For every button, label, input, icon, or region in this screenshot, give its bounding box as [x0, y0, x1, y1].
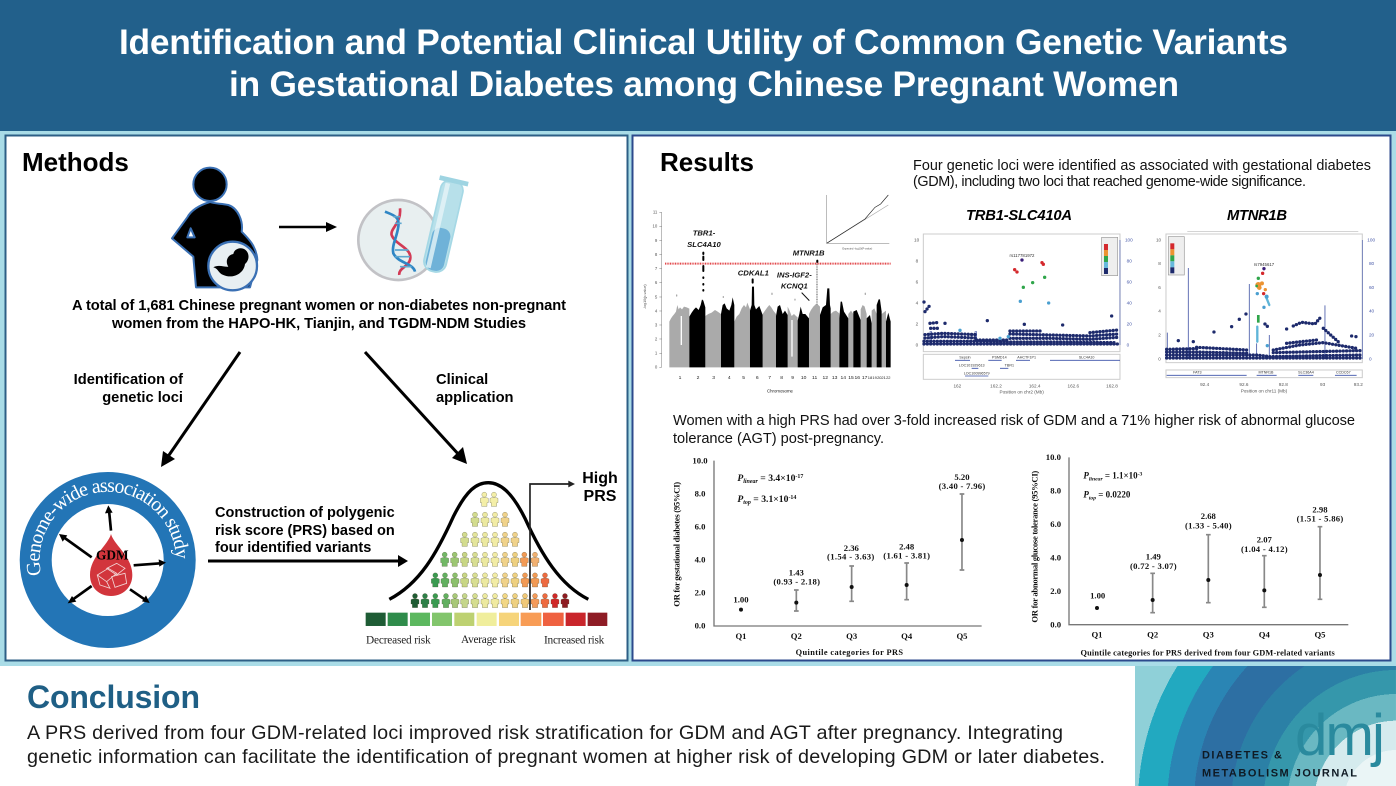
- text: construction of polygenic risk score: [215, 505, 395, 556]
- gene track: LOC100996579: [964, 371, 990, 375]
- panel: methods: [4, 134, 628, 662]
- chart: OR for gestational diabetes: [671, 455, 985, 657]
- chromosome numbers: 5: [742, 375, 745, 381]
- OR value labels: 2.48: [899, 541, 915, 551]
- heading: locus MTNR1B: MTNR1B: [1227, 208, 1287, 224]
- x axis labels: Q5: [1314, 630, 1326, 640]
- y axis ticks: 8.0: [1050, 485, 1061, 495]
- axis labels: 10: [914, 237, 920, 242]
- ring label: Genome-wide association study: [26, 482, 188, 576]
- OR value labels: (1.51 - 5.86): [1297, 514, 1343, 524]
- logo text: METABOLISM JOURNAL: [1202, 767, 1357, 779]
- chromosome numbers: [679, 375, 891, 394]
- OR value labels: 1.00: [1090, 591, 1105, 601]
- y axis ticks: 6.0: [695, 521, 705, 531]
- text: conclusion body: A PRS derived from four GDM-related loci improved risk stratification for GDM and AGT after pregnancy. Integrating: [27, 722, 1063, 744]
- label: identification of genetic loci: genetic loci: [102, 390, 183, 406]
- chromosome numbers: 6: [756, 375, 759, 381]
- OR value labels: 2.36: [844, 543, 860, 553]
- text: conclusion body: genetic information can facilitate the identification of pregnant women at higher risk of developing GDM or later diabetes.: [27, 746, 1105, 768]
- gene labels: KCNQ1: [781, 281, 808, 290]
- arrow: to clinical application: [365, 352, 467, 464]
- axis labels: 100: [1125, 237, 1133, 242]
- gene track: [923, 354, 1120, 379]
- OR value labels: (0.72 - 3.07): [1130, 561, 1177, 571]
- axis labels: 40: [1127, 300, 1132, 305]
- curve: [389, 483, 588, 599]
- y axis: [643, 210, 662, 370]
- y axis ticks: 4.0: [695, 555, 705, 565]
- y axis ticks: 2.0: [1050, 586, 1061, 596]
- OR value labels: 1.43: [789, 567, 805, 577]
- white gaps near centromeres: [681, 316, 792, 357]
- gene track: FAT3: [1193, 371, 1202, 375]
- axis labels: 0: [1127, 342, 1130, 347]
- gene track: LOC101929613: [959, 364, 985, 368]
- label: identification of genetic loci: Identification of: [74, 372, 183, 388]
- OR value labels: (1.04 - 4.12): [1241, 544, 1288, 554]
- chromosome numbers: 20: [877, 375, 882, 380]
- gene track: TBR1: [1005, 364, 1014, 368]
- y axis: 11: [653, 210, 658, 215]
- text: construction of polygenic risk score: Construction of polygenic: [215, 505, 395, 521]
- LD coloured points: [1257, 297, 1269, 342]
- P values: P: [1083, 490, 1089, 500]
- axis labels: 8: [916, 258, 919, 263]
- axis labels: 10: [1156, 237, 1162, 242]
- x axis title: Quintile categories for PRS: [796, 648, 903, 657]
- axis labels: 100: [1367, 237, 1375, 242]
- significance line: [665, 261, 891, 267]
- x axis ticks: 92.6: [1239, 382, 1249, 387]
- x axis ticks: 162.2: [990, 383, 1002, 388]
- x axis labels: Q2: [1147, 630, 1158, 640]
- arrow: to GWAS: [161, 352, 240, 467]
- chart: Manhattan plot: [643, 195, 891, 394]
- header banner: [0, 0, 1396, 131]
- gene track: [1166, 370, 1362, 378]
- inset: QQ plot: [827, 195, 889, 250]
- x axis labels: Q1: [1091, 630, 1103, 640]
- title: in Gestational Diabetes among Chinese Pregnant Women: [229, 65, 1179, 104]
- chromosome numbers: 1: [679, 375, 682, 381]
- risk colour scale: [366, 613, 607, 626]
- heading: methods: Methods: [22, 147, 129, 177]
- label: GDM: GDM: [96, 547, 129, 562]
- chromosome numbers: 14: [841, 375, 846, 381]
- high PRS marker arrow: [530, 484, 569, 610]
- LD legend: [1102, 237, 1118, 276]
- axis labels: 2: [1158, 333, 1161, 338]
- axis labels: 60: [1369, 285, 1375, 290]
- heading: conclusion: Conclusion: [27, 679, 200, 715]
- chromosome numbers: 7: [768, 375, 771, 381]
- chromosome numbers: 8: [780, 375, 783, 381]
- chromosome numbers: 15: [848, 375, 854, 381]
- axis labels: 20: [1369, 333, 1375, 338]
- y axis ticks: 10.0: [1046, 452, 1061, 462]
- y axis: 6: [655, 280, 658, 285]
- P values: = 1.1×10: [1103, 470, 1138, 480]
- y axis: 10: [653, 224, 658, 229]
- axis labels: 20: [1127, 321, 1132, 326]
- OR value labels: 2.07: [1257, 534, 1273, 544]
- axis labels: 4: [1158, 309, 1161, 314]
- y axis: 0: [655, 365, 658, 370]
- axis labels: 4: [916, 300, 919, 305]
- y axis: 9: [655, 238, 658, 243]
- gene track: PSMD14: [992, 356, 1007, 360]
- text: high PRS risk: Women with a high PRS had over 3-fold increased risk of GDM and a 71% higher risk of abnormal glucose: [673, 413, 1355, 429]
- y axis: 8: [655, 252, 658, 257]
- x axis labels: Q1: [735, 631, 747, 641]
- x axis labels: Q5: [956, 631, 968, 641]
- P values: [1083, 470, 1143, 502]
- gene labels: SLC4A10: [687, 240, 722, 249]
- LD coloured points: [1022, 276, 1046, 289]
- gene track: CCDC67: [1336, 371, 1351, 375]
- background band: [0, 131, 1396, 666]
- axis labels: 2: [916, 321, 919, 326]
- gene track: MTNR1B: [1258, 371, 1274, 375]
- gene track: Sepsin: [959, 356, 971, 360]
- gene track: AHCTF1P1: [1017, 356, 1036, 360]
- OR value labels: 2.68: [1201, 511, 1217, 521]
- icon: pregnant woman: [172, 168, 257, 290]
- axis labels: 0: [1369, 356, 1372, 361]
- axis labels: [914, 237, 1133, 347]
- chromosome numbers: 9: [791, 375, 794, 381]
- gene labels: INS-IGF2-: [777, 270, 812, 279]
- chr11 signal column: [814, 261, 819, 305]
- chromosome numbers: 17: [862, 375, 868, 381]
- icon: test tube: [419, 175, 469, 275]
- x axis labels: [735, 631, 968, 641]
- OR value labels: 2.98: [1312, 504, 1328, 514]
- text: study population: [72, 298, 566, 332]
- chromosome numbers: 19: [872, 375, 878, 380]
- y axis: 2: [655, 336, 658, 341]
- axis labels: 6: [1158, 285, 1161, 290]
- recombination spikes: [1167, 268, 1325, 359]
- inset: QQ plot: Expected -log10(P-value): [842, 246, 872, 250]
- arrow: woman to sample: [279, 222, 337, 232]
- y axis title: OR for gestational diabetes (95%CI): [671, 482, 681, 607]
- x axis ticks: Position on chr11 (Mb): [1241, 389, 1288, 394]
- LD legend: [1168, 237, 1184, 275]
- OR value labels: [1090, 504, 1343, 601]
- label: clinical application: application: [436, 390, 514, 406]
- people pyramid: [411, 492, 569, 608]
- background variant points: [1167, 317, 1362, 358]
- P values: = 0.0220: [1096, 490, 1131, 500]
- chromosome numbers: 11: [812, 375, 817, 381]
- text: four genetic loci: [913, 158, 1371, 190]
- P values: P: [737, 473, 743, 484]
- text: high PRS risk: tolerance (AGT) post-pregnancy.: [673, 431, 884, 447]
- y axis ticks: [692, 455, 708, 631]
- P values: -14: [788, 495, 796, 501]
- gene labels: [687, 229, 825, 290]
- P values: P: [737, 494, 743, 505]
- axis labels: 8: [1158, 261, 1161, 266]
- x axis title: Quintile categories for PRS derived from four GDM-related variants: [1080, 649, 1336, 658]
- chromosome numbers: Chromosome: [767, 389, 794, 394]
- P values: -3: [1138, 471, 1143, 477]
- diagram: risk distribution bell curve: [366, 481, 607, 647]
- text: four genetic loci: Four genetic loci were identified as associated with gestational diabetes: [913, 158, 1371, 174]
- OR value labels: 5.20: [954, 472, 970, 482]
- y axis ticks: [1046, 452, 1061, 629]
- text: construction of polygenic risk score: risk score (PRS) based on: [215, 523, 395, 539]
- y axis: 7: [655, 266, 658, 271]
- x axis ticks: 92.4: [1200, 382, 1210, 387]
- error bars: [794, 494, 964, 611]
- y axis: 3: [655, 322, 658, 327]
- logo text: [1202, 750, 1357, 779]
- y axis: 1: [655, 351, 658, 356]
- axis labels: [1156, 237, 1375, 361]
- label: clinical application: Clinical: [436, 372, 488, 388]
- logo: Diabetes & Metabolism Journal: [1135, 666, 1396, 786]
- label: identification of genetic loci: [74, 372, 183, 406]
- axis labels: 80: [1369, 261, 1375, 266]
- P values: [737, 473, 803, 506]
- y axis ticks: 0.0: [1050, 619, 1061, 629]
- grey chromosomes: [669, 303, 886, 367]
- x axis ticks: 93.2: [1354, 382, 1363, 387]
- label: high PRS: [582, 470, 618, 505]
- text: study population: women from the HAPO-HK, Tianjin, and TGDM-NDM Studies: [111, 316, 526, 332]
- chart: regional plot TRB1: rs117781972: [1010, 253, 1035, 258]
- gene labels: MTNR1B: [793, 248, 825, 257]
- arrow: construction of PRS: [208, 555, 408, 567]
- text: four genetic loci: (GDM), including two loci that reached genome-wide significance.: [913, 174, 1306, 190]
- P values: = 3.4×10: [758, 473, 796, 484]
- text: study population: A total of 1,681 Chinese pregnant women or non-diabetes non-pregnant: [72, 298, 566, 314]
- error bars: [1150, 527, 1322, 613]
- OR value labels: (3.40 - 7.96): [939, 481, 985, 491]
- x axis labels: Q4: [901, 631, 913, 641]
- title: [119, 23, 1288, 104]
- OR value labels: 1.49: [1146, 552, 1162, 562]
- P values: top: [1089, 496, 1096, 502]
- x axis ticks: 93: [1320, 382, 1326, 387]
- chromosome numbers: 18: [868, 375, 873, 380]
- chromosome numbers: 3: [712, 375, 715, 381]
- chart: OR for abnormal glucose tolerance: [1030, 452, 1348, 658]
- chromosome numbers: 4: [728, 375, 731, 381]
- risk scale labels: Average risk: [461, 634, 516, 646]
- P values: = 3.1×10: [751, 494, 789, 505]
- panel: conclusion: [0, 666, 1135, 786]
- chromosome numbers: 16: [855, 375, 860, 381]
- P values: linear: [1089, 476, 1103, 482]
- x axis labels: Q3: [846, 631, 858, 641]
- icon: DNA and test tube: [358, 175, 469, 280]
- y axis: -log10(p-value): [643, 284, 647, 309]
- axis labels: 6: [916, 279, 919, 284]
- y axis ticks: 0.0: [695, 621, 705, 631]
- risk scale labels: Increased risk: [544, 635, 605, 647]
- y axis ticks: 4.0: [1050, 552, 1061, 562]
- axis labels: 80: [1127, 258, 1132, 263]
- icon: blood drop: [59, 505, 166, 603]
- x axis ticks: 162.6: [1067, 383, 1080, 388]
- x axis labels: [1091, 630, 1326, 640]
- OR value labels: 1.00: [733, 595, 749, 605]
- y axis ticks: 6.0: [1050, 519, 1061, 529]
- OR value labels: [733, 472, 985, 605]
- chromosome numbers: 2: [697, 375, 700, 381]
- P values: P: [1083, 470, 1089, 480]
- logo text: DIABETES &: [1202, 750, 1282, 762]
- chromosome numbers: 21: [881, 375, 887, 380]
- OR points: [739, 538, 964, 612]
- background variant points: [924, 306, 1120, 344]
- x axis ticks: 162.8: [1106, 383, 1118, 388]
- diagram: genome-wide association study ring: [20, 472, 196, 648]
- chart: regional plot TRB1: [914, 234, 1133, 394]
- OR value labels: (1.33 - 5.40): [1185, 521, 1232, 531]
- chromosome numbers: 22: [886, 375, 891, 380]
- arrows: radiating from GDM: [59, 505, 166, 603]
- panel: results: [632, 136, 1390, 660]
- axis labels: 60: [1127, 279, 1132, 284]
- gene track: SLC4A10: [1079, 356, 1094, 360]
- P values: linear: [743, 479, 759, 485]
- P values: -17: [795, 474, 803, 480]
- y axis ticks: 2.0: [695, 588, 705, 598]
- x axis ticks: [1200, 382, 1363, 394]
- y axis ticks: 10.0: [692, 455, 708, 465]
- y axis title: OR for abnormal glucose tolerance (95%CI): [1030, 471, 1040, 623]
- text: high PRS risk: [673, 413, 1355, 447]
- x axis labels: Q2: [791, 631, 802, 641]
- OR value labels: (0.93 - 2.18): [773, 576, 820, 586]
- y axis: 5: [655, 294, 658, 299]
- gene labels: TBR1-: [693, 229, 716, 238]
- y axis: 4: [655, 308, 658, 313]
- label: clinical application: [436, 372, 514, 406]
- x axis labels: Q4: [1259, 630, 1271, 640]
- text: conclusion body: [27, 722, 1105, 768]
- chart: regional plot MTNR1B: [1156, 231, 1375, 394]
- black chromosomes: [689, 287, 891, 367]
- x axis ticks: 162.4: [1029, 383, 1041, 388]
- chromosome numbers: 12: [823, 375, 828, 381]
- OR value labels: (1.61 - 3.81): [883, 550, 930, 560]
- chart: regional plot MTNR1B: rs7945617: [1254, 262, 1275, 267]
- axis labels: 40: [1369, 309, 1375, 314]
- logo wordmark: dmj: [1295, 703, 1385, 768]
- icon: fetus: [213, 248, 249, 276]
- text: construction of polygenic risk score: four identified variants: [215, 540, 371, 556]
- gene labels: CDKAL1: [738, 268, 769, 277]
- x axis ticks: 92.8: [1279, 382, 1288, 387]
- pointer: KCNQ1: [802, 293, 809, 301]
- risk scale labels: Decreased risk: [366, 635, 431, 647]
- axis labels: 0: [1158, 356, 1161, 361]
- chromosome numbers: 13: [832, 375, 838, 381]
- axis labels: 0: [916, 342, 919, 347]
- risk scale labels: [366, 634, 605, 647]
- P values: top: [743, 500, 751, 506]
- label: high PRS: PRS: [584, 488, 617, 505]
- heading: locus TRB1-SLC410A: TRB1-SLC410A: [966, 208, 1072, 224]
- gene track: SLC36A4: [1298, 371, 1314, 375]
- y axis ticks: 8.0: [695, 488, 705, 498]
- recombination line: [924, 332, 1118, 344]
- x axis ticks: Position on chr2 (Mb): [1000, 389, 1044, 394]
- chromosome numbers: 10: [801, 375, 807, 381]
- heading: results: Results: [660, 147, 754, 177]
- OR value labels: (1.54 - 3.63): [827, 552, 874, 562]
- x axis ticks: 162: [953, 383, 962, 388]
- x axis ticks: [953, 383, 1118, 394]
- title: Identification and Potential Clinical Utility of Common Genetic Variants: [119, 23, 1288, 62]
- label: high PRS: High: [582, 470, 618, 487]
- OR points: [1095, 573, 1322, 610]
- x axis labels: Q3: [1203, 630, 1215, 640]
- peak points: [703, 253, 817, 291]
